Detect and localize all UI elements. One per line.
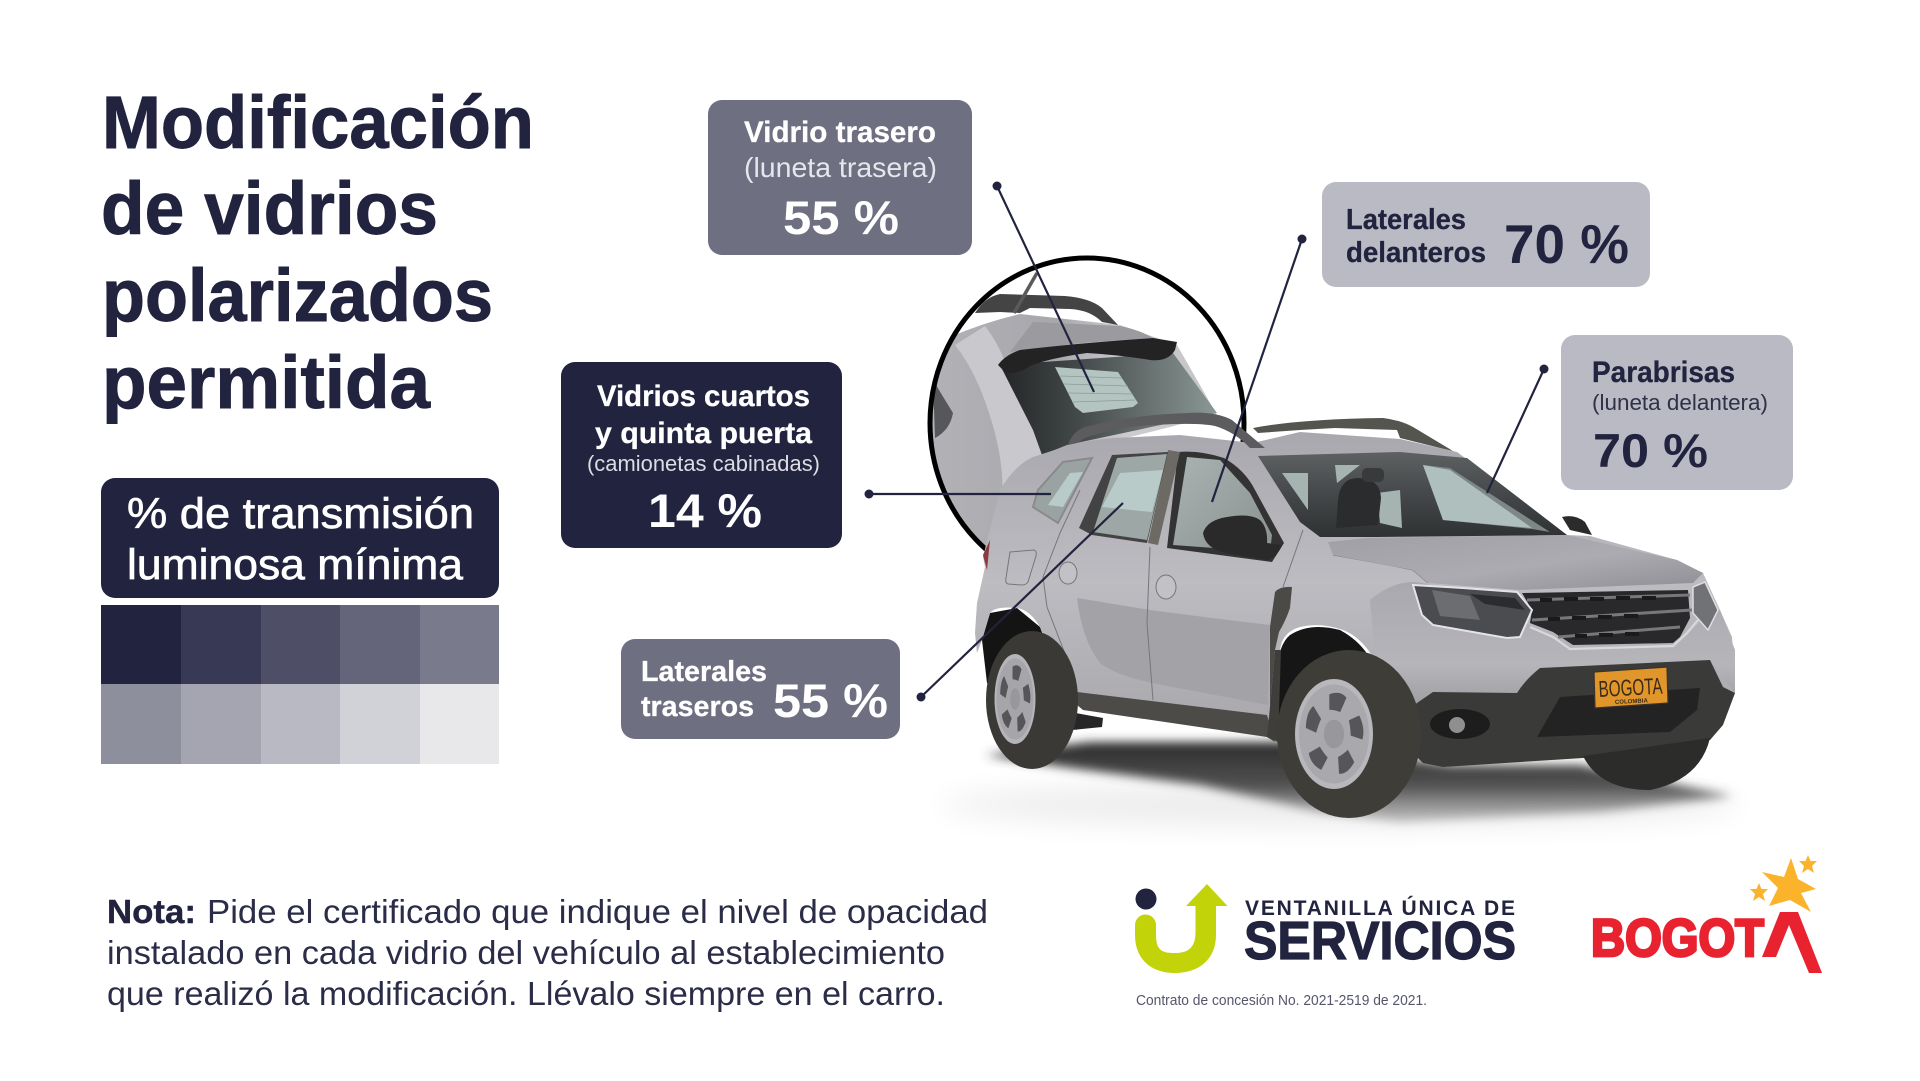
- door lower shade: [1077, 598, 1270, 705]
- front door window: [1167, 452, 1284, 562]
- title: permitida: [102, 341, 431, 424]
- logo: ventanilla unica de servicios: Contrato de concesión No. 2021-2519 de 2021.: [1136, 993, 1427, 1009]
- legend heading: luminosa mínima: [127, 541, 463, 589]
- roof rails: [1068, 413, 1453, 451]
- car illustration: [940, 413, 1740, 827]
- rear far tyre: [1583, 738, 1710, 790]
- callout: parabrisas: [1561, 335, 1793, 490]
- windshield: [1258, 452, 1567, 537]
- nose and bumper: [1370, 582, 1735, 720]
- panel seams, handles, fuel door: [1006, 490, 1428, 700]
- icon: dot and arrow: [1135, 884, 1228, 973]
- licence plate: [1594, 667, 1668, 708]
- leader: rear window: [992, 182, 1094, 392]
- tail light: [983, 540, 990, 570]
- front wheel arch: [1277, 627, 1397, 740]
- leader: rear side windows: [916, 503, 1123, 702]
- title: [101, 81, 534, 424]
- callout: vidrio trasero: 55 %: [783, 191, 899, 244]
- callout: laterales delanteros: delanteros: [1346, 237, 1486, 269]
- car shadow: [940, 742, 1740, 827]
- callout: laterales traseros: [621, 639, 900, 739]
- rear wheel arch: [982, 608, 1077, 730]
- callout: laterales traseros: 55 %: [773, 674, 888, 727]
- licence plate: BOGOTA: [1598, 673, 1664, 702]
- callout: laterales delanteros: [1322, 182, 1650, 287]
- legend: transmission scale: [101, 478, 499, 764]
- callout: parabrisas: 70 %: [1593, 424, 1708, 477]
- front wheel: [1277, 650, 1421, 818]
- magnifier circle: rear window detail: [928, 256, 1246, 552]
- callout: vidrios cuartos: [561, 362, 842, 548]
- lower grille: [1537, 688, 1700, 737]
- leader: front side windows: [1212, 234, 1306, 502]
- logo: bogota: [1591, 855, 1822, 973]
- callout: vidrios cuartos: (camionetas cabinadas): [587, 451, 820, 476]
- note text: Nota:: [107, 893, 196, 930]
- logo: ventanilla unica de servicios: VENTANILLA ÚNICA DE: [1245, 896, 1515, 920]
- note text: que realizó la modificación. Llévalo siempre en el carro.: [107, 975, 945, 1012]
- callout: vidrio trasero: Vidrio trasero: [744, 116, 936, 149]
- callout: vidrio trasero: [708, 100, 972, 255]
- quarter window: [1033, 458, 1092, 523]
- logo: ventanilla unica de servicios: [1135, 884, 1516, 1009]
- passenger mirror: [1562, 516, 1592, 535]
- callout: parabrisas: (luneta delantera): [1592, 390, 1768, 415]
- legend heading: % de transmisión: [127, 490, 474, 538]
- rear wheel: [986, 631, 1078, 769]
- callout: laterales traseros: traseros: [641, 691, 754, 723]
- centre pillar: [1148, 450, 1180, 545]
- title: Modificación: [102, 81, 534, 164]
- note text: Pide el certificado que indique el nivel de opacidad: [207, 893, 988, 930]
- callout: vidrios cuartos: 14 %: [648, 484, 762, 537]
- callout: laterales delanteros: Laterales: [1346, 204, 1466, 236]
- callout: laterales delanteros: 70 %: [1504, 213, 1629, 275]
- title: de vidrios: [101, 167, 438, 250]
- leader: windshield: [1487, 364, 1548, 493]
- side mirror: [1203, 516, 1282, 560]
- rear door window: [1079, 452, 1168, 543]
- fog lamp: [1430, 709, 1490, 739]
- legend heading: [101, 478, 499, 598]
- logo: ventanilla unica de servicios: SERVICIOS: [1244, 911, 1516, 971]
- callout: laterales traseros: Laterales: [641, 656, 767, 688]
- title: polarizados: [102, 254, 493, 337]
- callout: parabrisas: Parabrisas: [1592, 356, 1735, 389]
- note text: [107, 893, 988, 1012]
- leader lines: [864, 182, 1548, 702]
- licence plate: COLOMBIA: [1615, 698, 1649, 706]
- icon: stars: [1750, 855, 1817, 912]
- side trim and mud flap: [1057, 587, 1292, 742]
- callout: vidrios cuartos: y quinta puerta: [595, 417, 812, 450]
- headlights: [1413, 582, 1718, 638]
- hood: [1328, 535, 1703, 590]
- grille: [1522, 590, 1698, 649]
- note text: instalado en cada vidrio del vehículo al establecimiento: [107, 934, 945, 971]
- lower bumper: [1392, 660, 1735, 767]
- callout: vidrio trasero: (luneta trasera): [744, 152, 937, 183]
- colour swatches: [101, 605, 499, 764]
- logo: bogota: BOGOT: [1591, 909, 1764, 968]
- leader: quarter windows: [864, 490, 1051, 498]
- callout: vidrios cuartos: Vidrios cuartos: [597, 380, 810, 413]
- car body: [975, 432, 1735, 767]
